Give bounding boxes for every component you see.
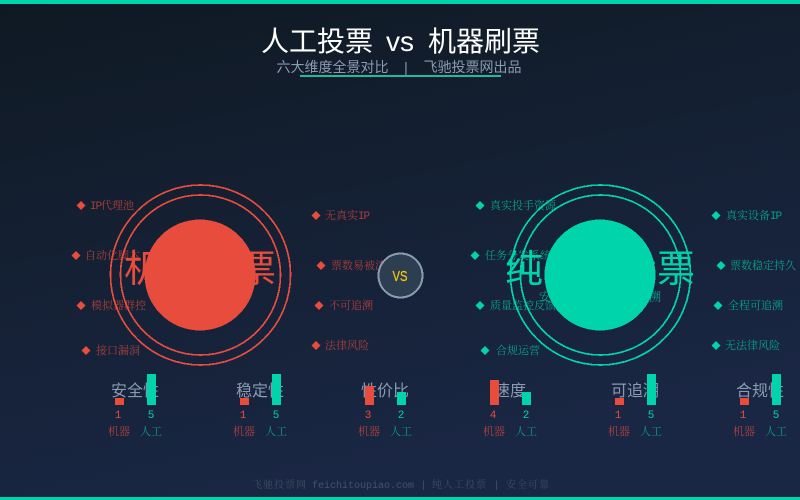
VS badge (378, 254, 422, 298)
human feature list left: 合规运营 (496, 343, 540, 358)
chart: 稳定性: 人工 (265, 425, 287, 439)
chart: 速度: 机器 (483, 424, 505, 439)
chart: 性价比: 人工 (390, 425, 412, 439)
human feature list right: 真实设备IP (726, 208, 783, 223)
chart: 性价比: 3 (365, 410, 371, 422)
machine feature list left: 自动化脚本 (85, 248, 140, 263)
machine heading: 机器刷票 (124, 249, 276, 291)
human feature list left: 真实投手资源 (490, 198, 557, 213)
footer: | (420, 480, 427, 492)
top accent bar (0, 0, 800, 4)
machine feature list right: 法律风险 (325, 338, 369, 353)
chart: 可追溯 (608, 374, 662, 439)
chart: 合规性: 机器 (733, 424, 755, 439)
chart: 稳定性: 1 (240, 410, 247, 422)
machine feature list right: 票数易被清 (331, 258, 386, 273)
panel: human voting (470, 185, 796, 365)
human heading: 纯人工投票 (505, 249, 695, 291)
chart: 安全性: 机器 (108, 424, 130, 439)
chart: 可追溯: 机器 (608, 424, 630, 439)
chart: 合规性: 合规性 (736, 382, 784, 400)
chart: 稳定性: 机器 (233, 424, 255, 439)
footer: | (493, 480, 500, 492)
footer: 飞驰投票网 (252, 478, 307, 492)
chart: 可追溯: 可追溯 (611, 382, 659, 400)
chart: 安全性 (108, 374, 162, 439)
human feature list right (712, 208, 796, 353)
machine feature list right (312, 208, 386, 353)
footer (252, 478, 550, 492)
human feature list left (470, 198, 557, 358)
chart: 性价比: 性价比 (361, 382, 409, 400)
chart: 合规性: 人工 (765, 425, 787, 439)
chart: 性价比 (358, 382, 412, 439)
footer: 纯人工投票 (432, 478, 487, 492)
machine feature list left: IP代理池 (90, 198, 134, 213)
chart: 性价比: 机器 (358, 424, 380, 439)
machine feature list right: 不可追溯 (329, 299, 373, 313)
chart: 速度: 2 (523, 410, 529, 422)
chart: 安全性: 安全性 (111, 382, 159, 400)
footer: feichitoupiao.com (312, 480, 414, 492)
human rings (510, 185, 690, 365)
subtitle: 六大维度全景对比 (276, 59, 388, 75)
chart: 合规性: 5 (773, 410, 779, 422)
machine feature list left (72, 198, 146, 358)
subtitle: 飞驰投票网出品 (424, 59, 522, 75)
human feature list left: 任务分发系统 (485, 248, 551, 263)
title: 机器刷票 (428, 26, 540, 57)
bottom accent bar (0, 497, 800, 500)
subtitle: | (404, 59, 408, 75)
chart: 安全性: 5 (148, 410, 154, 422)
chart: 安全性: 人工 (140, 425, 162, 439)
chart: 合规性: 1 (740, 410, 747, 422)
chart: 可追溯: 1 (615, 410, 622, 422)
VS badge: VS (392, 268, 408, 285)
human feature list right: 无法律风险 (725, 338, 780, 353)
chart: 稳定性: 稳定性 (236, 382, 284, 400)
machine feature list left: 模拟器群控 (91, 298, 146, 313)
chart: 速度: 速度 (494, 382, 526, 400)
footer: 安全可靠 (506, 478, 550, 492)
machine feature list left: 接口漏洞 (96, 343, 140, 358)
chart: 可追溯: 人工 (640, 425, 662, 439)
chart: 可追溯: 5 (648, 410, 654, 422)
chart: 速度: 4 (490, 410, 497, 422)
chart: 稳定性 (233, 374, 287, 439)
chart: 稳定性: 5 (273, 410, 279, 422)
panel: machine voting (72, 185, 386, 365)
human feature list right: 票数稳定持久 (730, 258, 796, 273)
machine core circle (144, 220, 256, 330)
chart: 合规性 (733, 374, 787, 439)
human feature list left: 质量监控反馈 (490, 298, 556, 313)
human feature list right: 全程可追溯 (728, 298, 783, 313)
subtitle (276, 59, 522, 75)
chart: 性价比: 2 (398, 410, 404, 422)
chart: 速度 (483, 380, 537, 439)
chart: 速度: 人工 (515, 425, 537, 439)
title: vs (386, 26, 414, 57)
machine feature list right: 无真实IP (325, 208, 371, 223)
human core circle (544, 220, 656, 330)
chart: 安全性: 1 (115, 410, 122, 422)
title underline (300, 75, 501, 77)
machine rings (110, 185, 290, 365)
title: 人工投票 (261, 26, 373, 57)
title (261, 26, 540, 57)
human tagline: 安全 · 稳定 · 可追溯 (539, 289, 661, 305)
